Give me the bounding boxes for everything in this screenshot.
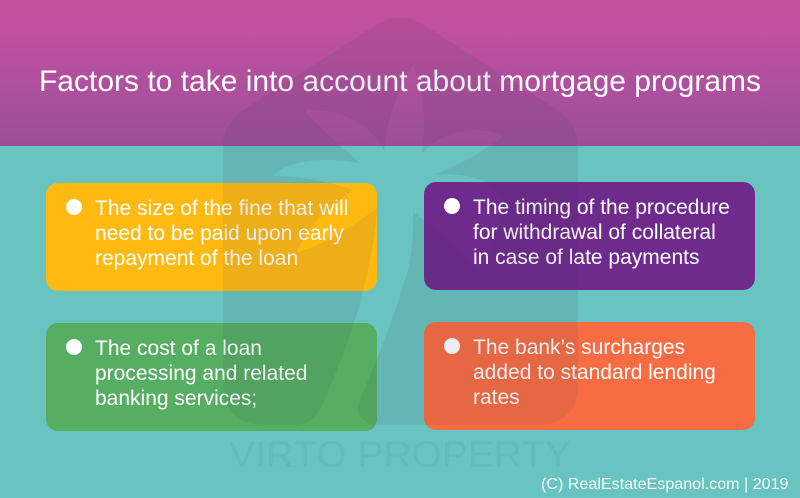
house silhouette	[223, 18, 578, 425]
title: Factors to take into account about mortgage programs	[39, 65, 761, 98]
text: surcharges	[473, 336, 716, 409]
text: collateral	[473, 196, 730, 269]
footer credit: (C) RealEstateEspanol.com | 2019	[541, 475, 788, 493]
panel: collateral withdrawal	[424, 182, 755, 290]
text: collateral: in case of late payments	[473, 246, 699, 269]
wordmark: VIRTO PROPERTY	[229, 434, 571, 475]
text: loan cost	[95, 337, 307, 410]
text: loan cost: The cost of a loan	[95, 337, 262, 360]
bullet	[444, 198, 460, 214]
text: collateral: The timing of the procedure	[473, 196, 730, 219]
bullet	[66, 339, 82, 355]
text: fine: need to be paid upon early	[95, 222, 344, 245]
panel: bank surcharges	[424, 322, 755, 430]
text: fine: The size of the fine that will	[95, 197, 348, 220]
text: surcharges: added to standard lending	[473, 361, 716, 384]
header band	[0, 0, 800, 146]
text: loan cost: processing and related	[95, 362, 307, 385]
text: surcharges: rates	[473, 386, 520, 409]
bullet	[66, 199, 82, 215]
panel: fine for early repayment	[46, 183, 377, 291]
bullet	[444, 338, 460, 354]
text: surcharges: The bank’s surcharges	[473, 336, 685, 359]
panel: loan processing cost	[46, 323, 377, 431]
text: fine: repayment of the loan	[95, 247, 298, 270]
text: fine	[95, 197, 348, 270]
text: loan cost: banking services;	[95, 387, 257, 410]
text: collateral: for withdrawal of collateral	[473, 221, 716, 244]
